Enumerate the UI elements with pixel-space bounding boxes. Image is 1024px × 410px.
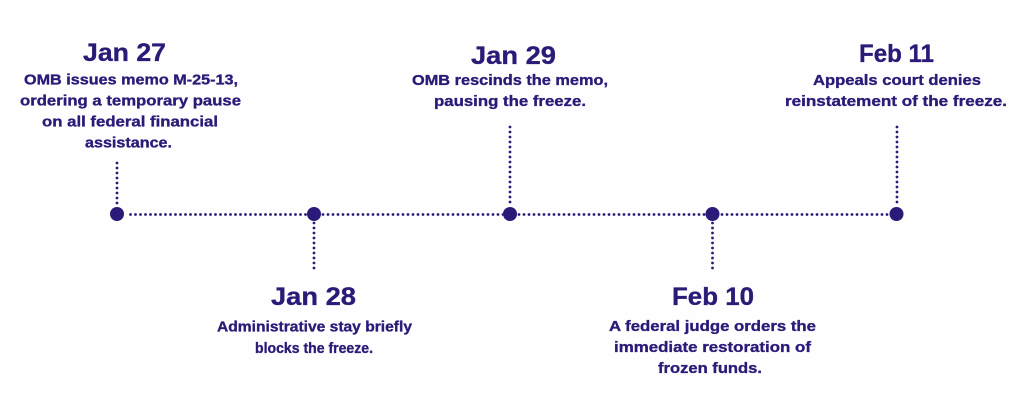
event: Feb 11 — [785, 40, 1007, 110]
event: Feb 10: Feb 10 — [672, 283, 754, 311]
event: Jan 29 — [412, 42, 608, 110]
event: Jan 27 — [20, 39, 241, 152]
event: Feb 11: reinstatement of the freeze. — [785, 93, 1007, 110]
timeline axis — [110, 127, 904, 270]
event: Feb 10: A federal judge orders the — [609, 318, 816, 335]
event: Jan 28 — [217, 283, 413, 357]
event: Feb 11: Appeals court denies — [813, 72, 981, 89]
event: Feb 10 — [609, 283, 816, 377]
event: Jan 27: OMB issues memo M-25-13, — [24, 72, 238, 88]
event: Jan 29: Jan 29 — [471, 42, 556, 70]
event: Feb 10: immediate restoration of — [614, 339, 812, 356]
event: Jan 29: OMB rescinds the memo, — [412, 72, 608, 89]
event: Jan 28: Jan 28 — [271, 283, 356, 311]
event: Jan 27: on all federal financial — [42, 114, 218, 130]
event: Jan 29: pausing the freeze. — [434, 93, 586, 110]
event: Jan 28: blocks the freeze. — [255, 340, 373, 357]
event: Jan 27: ordering a temporary pause — [20, 92, 241, 110]
event: Feb 10: frozen funds. — [658, 360, 762, 377]
event: Feb 11: Feb 11 — [859, 40, 934, 68]
event: Jan 27: assistance. — [85, 134, 172, 152]
event: Jan 28: Administrative stay briefly — [217, 318, 413, 336]
event: Jan 27: Jan 27 — [83, 39, 166, 67]
